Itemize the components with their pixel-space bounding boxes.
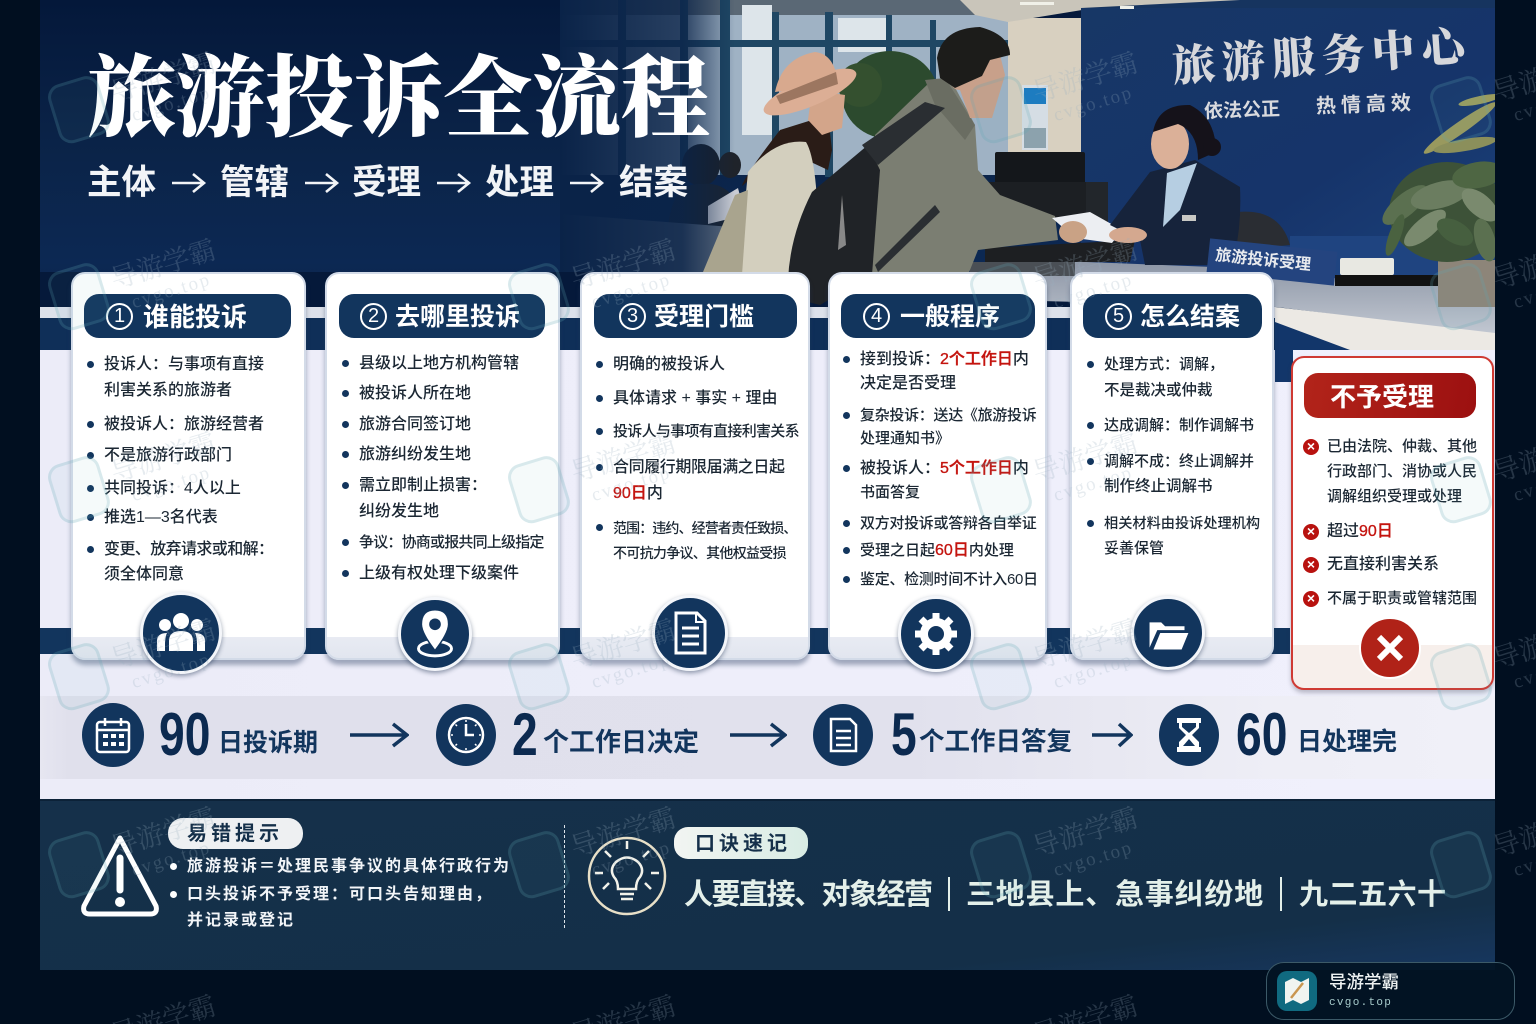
watermark layer: cvgo.top bbox=[589, 649, 674, 693]
mistakes list bbox=[170, 857, 511, 929]
wall sign: service center: 旅游服务中心 bbox=[1171, 24, 1473, 91]
watermark layer: cvgo.top bbox=[589, 837, 674, 881]
not-accepted list: 超过90日 bbox=[1327, 523, 1393, 540]
card 2 list: 旅游合同签订地 bbox=[359, 416, 471, 433]
card 5 list: 不是裁决或仲裁 bbox=[1104, 382, 1213, 399]
woman with hat bbox=[742, 115, 832, 186]
left fade bbox=[560, 0, 735, 272]
card 4 list: 双方对投诉或答辩各自举证 bbox=[860, 515, 1036, 532]
card 2 list: 被投诉人所在地 bbox=[359, 385, 471, 402]
watermark layer: cvgo.top bbox=[129, 462, 214, 506]
card 1 list: 投诉人：与事项有直接 bbox=[104, 356, 264, 373]
not-accepted list: 调解组织受理或处理 bbox=[1327, 488, 1462, 505]
card 2 list: 上级有权处理下级案件 bbox=[359, 565, 519, 582]
left back desk bbox=[560, 214, 745, 272]
card heading 4: 一般程序 bbox=[900, 303, 1000, 331]
card 2 list bbox=[342, 354, 544, 582]
card 1 list: 推选1—3名代表 bbox=[104, 509, 218, 526]
panel: card 3 acceptance threshold bbox=[580, 272, 810, 660]
card 5 list: 相关材料由投诉处理机构 bbox=[1104, 516, 1260, 532]
watermark layer: cvgo.top bbox=[1051, 649, 1136, 693]
stat: 90 days bbox=[82, 701, 318, 768]
panel: card 5 how to close bbox=[1070, 272, 1274, 660]
card 5 list: 调解不成：终止调解并 bbox=[1104, 453, 1254, 470]
lower panel bbox=[40, 350, 1495, 800]
arrow 3 bbox=[1092, 722, 1133, 748]
watermark layer: 导游学霸 bbox=[567, 803, 679, 863]
panel: card 2 where to complain bbox=[325, 272, 560, 660]
watermark layer: cvgo.top bbox=[1051, 837, 1136, 881]
unit: 个工作日答复 bbox=[919, 728, 1072, 756]
right plant bbox=[1438, 260, 1495, 307]
watermark layer: 导游学霸 bbox=[107, 615, 219, 675]
card 4 list: 处理通知书》 bbox=[860, 430, 950, 447]
wall sign: slogan: 热情高效 bbox=[1316, 92, 1416, 118]
subtitle: process flow: 结案 bbox=[619, 164, 688, 202]
card heading 1 bbox=[84, 294, 291, 338]
heading: not accepted: 不予受理 bbox=[1330, 382, 1434, 412]
card 4 list: 被投诉人：5个工作日内 bbox=[860, 460, 1029, 477]
not-accepted list: 不属于职责或管辖范围 bbox=[1327, 590, 1477, 607]
number 60: 60 bbox=[1236, 701, 1287, 768]
staff bbox=[1110, 160, 1240, 265]
card heading 3: 3 bbox=[627, 305, 638, 327]
card 5 list: 达成调解：制作调解书 bbox=[1104, 417, 1254, 434]
card 1 list: 利害关系的旅游者 bbox=[104, 382, 232, 399]
card 3 list: 合同履行期限届满之日起 bbox=[613, 459, 785, 476]
subtitle: process flow: 受理 bbox=[352, 164, 421, 202]
icon: people bbox=[140, 592, 222, 674]
card heading 2 bbox=[339, 294, 545, 338]
unit: 日处理完 bbox=[1297, 728, 1397, 756]
card heading 4: 4 bbox=[871, 305, 882, 327]
subtitle: process flow: 主体 bbox=[87, 164, 156, 202]
card heading 3 bbox=[594, 294, 797, 338]
card 3 list: 明确的被投诉人 bbox=[613, 356, 725, 373]
not-accepted list: × bbox=[1307, 556, 1315, 572]
card 5 list: 妥善保管 bbox=[1104, 540, 1164, 557]
mistakes list: 并记录或登记 bbox=[187, 912, 295, 929]
watermark layer: cvgo.top bbox=[589, 269, 674, 313]
mnemonic text bbox=[684, 877, 1447, 911]
icon: reply document bbox=[813, 704, 873, 766]
icon: document bbox=[652, 595, 728, 671]
back plant bbox=[842, 51, 938, 139]
subtitle: process flow: 处理 bbox=[485, 164, 554, 202]
watermark layer: 导游学霸 bbox=[107, 803, 219, 863]
card 4 list: 复杂投诉：送达《旅游投诉 bbox=[860, 407, 1036, 424]
card 3 list: 投诉人与事项有直接利害关系 bbox=[613, 423, 799, 440]
panel: card 4 general procedure bbox=[828, 272, 1047, 660]
stat: 5 working days bbox=[813, 701, 1072, 768]
logo name: 导游学霸 bbox=[1329, 972, 1399, 992]
watermark layer: 导游学霸 bbox=[1029, 48, 1141, 108]
card 1 list: 不是旅游行政部门 bbox=[104, 447, 232, 464]
desk sign bbox=[1207, 238, 1337, 286]
not-accepted list: 行政部门、消协或人民 bbox=[1327, 463, 1477, 480]
card heading 2: 去哪里投诉 bbox=[395, 303, 520, 331]
not-accepted list: × bbox=[1307, 438, 1315, 454]
number 2: 2 bbox=[512, 701, 538, 768]
card 1 list: 变更、放弃请求或和解： bbox=[104, 541, 273, 558]
logo url: cvgo.top bbox=[1329, 997, 1392, 1009]
watermark layer: cvgo.top bbox=[129, 269, 214, 313]
paper and hands bbox=[1052, 212, 1122, 243]
strips bbox=[40, 307, 1275, 318]
not-accepted list: × bbox=[1307, 590, 1315, 606]
card 1 list bbox=[87, 355, 273, 583]
watermark layer: 导游学霸 bbox=[567, 235, 679, 295]
tag: common mistakes bbox=[168, 818, 303, 849]
mnemonic text: 九二五六十 bbox=[1299, 879, 1447, 911]
watermark layer: 导游学霸 bbox=[1029, 615, 1141, 675]
card 2 list: 纠纷发生地 bbox=[359, 503, 439, 520]
wall sign: slogan bbox=[1204, 92, 1416, 123]
card 3 list: 不可抗力争议、其他权益受损 bbox=[613, 545, 786, 561]
card 5 list bbox=[1087, 356, 1260, 557]
tag: common mistakes: 易错提示 bbox=[187, 823, 283, 845]
card heading 5: 怎么结案 bbox=[1140, 303, 1240, 331]
watermark layer: 导游学霸 bbox=[1029, 235, 1141, 295]
logo badge bbox=[1266, 962, 1515, 1020]
card heading 1: 谁能投诉 bbox=[143, 302, 247, 332]
arrow 2 bbox=[730, 722, 787, 748]
card 4 list bbox=[843, 350, 1038, 588]
watermark layer: cvgo.top bbox=[129, 649, 214, 693]
card 2 list: 需立即制止损害： bbox=[359, 477, 487, 494]
card 5 list: 制作终止调解书 bbox=[1104, 478, 1213, 495]
mistakes list: 旅游投诉＝处理民事争议的具体行政行为 bbox=[187, 858, 511, 875]
divider bbox=[564, 825, 565, 928]
not-accepted list: 无直接利害关系 bbox=[1327, 556, 1439, 573]
unit: 个工作日决定 bbox=[543, 727, 699, 757]
card heading 2: 2 bbox=[368, 305, 379, 327]
panel: not accepted bbox=[1291, 356, 1494, 690]
icon: clock bbox=[436, 704, 496, 766]
icon: gear bbox=[898, 596, 974, 672]
wall shelf bbox=[1290, 236, 1495, 278]
card 2 list: 争议：协商或报共同上级指定 bbox=[359, 534, 544, 551]
card 1 list: 须全体同意 bbox=[104, 566, 184, 583]
title: 旅游投诉全流程 bbox=[87, 51, 710, 149]
watermark layer: 导游学霸 bbox=[107, 48, 219, 108]
watermark layer: cvgo.top bbox=[589, 462, 674, 506]
icon: red cross bbox=[1359, 619, 1421, 679]
arrow 1 bbox=[350, 722, 409, 748]
icon: location pin bbox=[398, 597, 472, 671]
subtitle: process flow: 管辖 bbox=[220, 164, 289, 202]
card heading 1: 1 bbox=[114, 305, 125, 327]
watermark layer: 导游学霸 bbox=[567, 428, 679, 488]
card 3 list: 90日内 bbox=[613, 485, 663, 502]
mnemonic text: 三地县上、急事纠纷地 bbox=[966, 879, 1264, 911]
tag: mnemonic: 口诀速记 bbox=[695, 833, 791, 855]
counter bbox=[985, 258, 1495, 335]
number 5: 5 bbox=[891, 701, 917, 768]
watermark layer: cvgo.top bbox=[1051, 269, 1136, 313]
icon: calendar bbox=[82, 703, 144, 767]
card heading 5 bbox=[1083, 294, 1262, 338]
watermark layer: 导游学霸 bbox=[567, 615, 679, 675]
card 1 list: 被投诉人：旅游经营者 bbox=[104, 416, 264, 433]
card heading 5: 5 bbox=[1113, 305, 1124, 327]
mistakes list: 口头投诉不予受理：可口头告知理由， bbox=[187, 886, 493, 903]
card 4 list: 书面答复 bbox=[860, 484, 920, 501]
watermark layer: cvgo.top bbox=[129, 837, 214, 881]
windows bbox=[560, 0, 1020, 175]
card 4 list: 鉴定、检测时间不计入60日 bbox=[860, 571, 1038, 588]
icon: light bulb bbox=[588, 836, 666, 916]
card 3 list: 范围：违约、经营者责任致损、 bbox=[613, 520, 796, 536]
watermark layer: cvgo.top bbox=[129, 82, 214, 126]
monitor bbox=[995, 152, 1085, 218]
not-accepted list: 已由法院、仲裁、其他 bbox=[1327, 438, 1477, 455]
icon: hourglass bbox=[1159, 704, 1219, 766]
number 90: 90 bbox=[159, 701, 210, 768]
watermark layer: 导游学霸 bbox=[1029, 803, 1141, 863]
card heading 3: 受理门槛 bbox=[654, 303, 754, 331]
card 4 list: 受理之日起60日内处理 bbox=[860, 542, 1014, 559]
not-accepted list bbox=[1303, 438, 1477, 607]
card 5 list: 处理方式：调解， bbox=[1104, 356, 1224, 373]
card 4 list: 决定是否受理 bbox=[860, 375, 956, 392]
not-accepted list: × bbox=[1307, 523, 1315, 539]
tag: mnemonic bbox=[674, 827, 808, 859]
back office people bbox=[682, 144, 720, 186]
watermark layer: 导游学霸 bbox=[107, 235, 219, 295]
card 2 list: 县级以上地方机构管辖 bbox=[359, 355, 519, 372]
card 2 list: 旅游纠纷发生地 bbox=[359, 446, 471, 463]
card 1 list: 共同投诉：4人以上 bbox=[104, 480, 241, 497]
icon: warning triangle bbox=[81, 836, 159, 916]
card 3 list bbox=[596, 355, 799, 561]
card 4 list: 接到投诉：2个工作日内 bbox=[860, 351, 1029, 368]
panel: card 1 who can complain bbox=[71, 272, 306, 660]
stat: 2 working days bbox=[436, 701, 699, 768]
mnemonic text: 人要直接、对象经营 bbox=[684, 879, 932, 911]
card 3 list: 具体请求 + 事实 + 理由 bbox=[613, 390, 777, 407]
logo icon bbox=[1277, 971, 1317, 1011]
wall sign: slogan: 依法公正 bbox=[1204, 99, 1280, 123]
watermark layer: 导游学霸 bbox=[107, 428, 219, 488]
card heading 4 bbox=[841, 294, 1035, 338]
right edge mask bbox=[1495, 0, 1536, 350]
watermark layer: cvgo.top bbox=[1051, 462, 1136, 506]
chair bbox=[1237, 212, 1290, 250]
desk sign: 旅游投诉受理 bbox=[1214, 247, 1312, 274]
watermark layer: cvgo.top bbox=[1051, 82, 1136, 126]
subtitle: process flow bbox=[87, 164, 688, 202]
unit: 日投诉期 bbox=[218, 729, 318, 757]
heading: not accepted bbox=[1304, 373, 1476, 418]
icon: folder bbox=[1131, 596, 1205, 670]
stat: 60 days bbox=[1159, 701, 1397, 768]
watermark layer: 导游学霸 bbox=[1029, 428, 1141, 488]
man with backpack bbox=[870, 78, 1058, 275]
